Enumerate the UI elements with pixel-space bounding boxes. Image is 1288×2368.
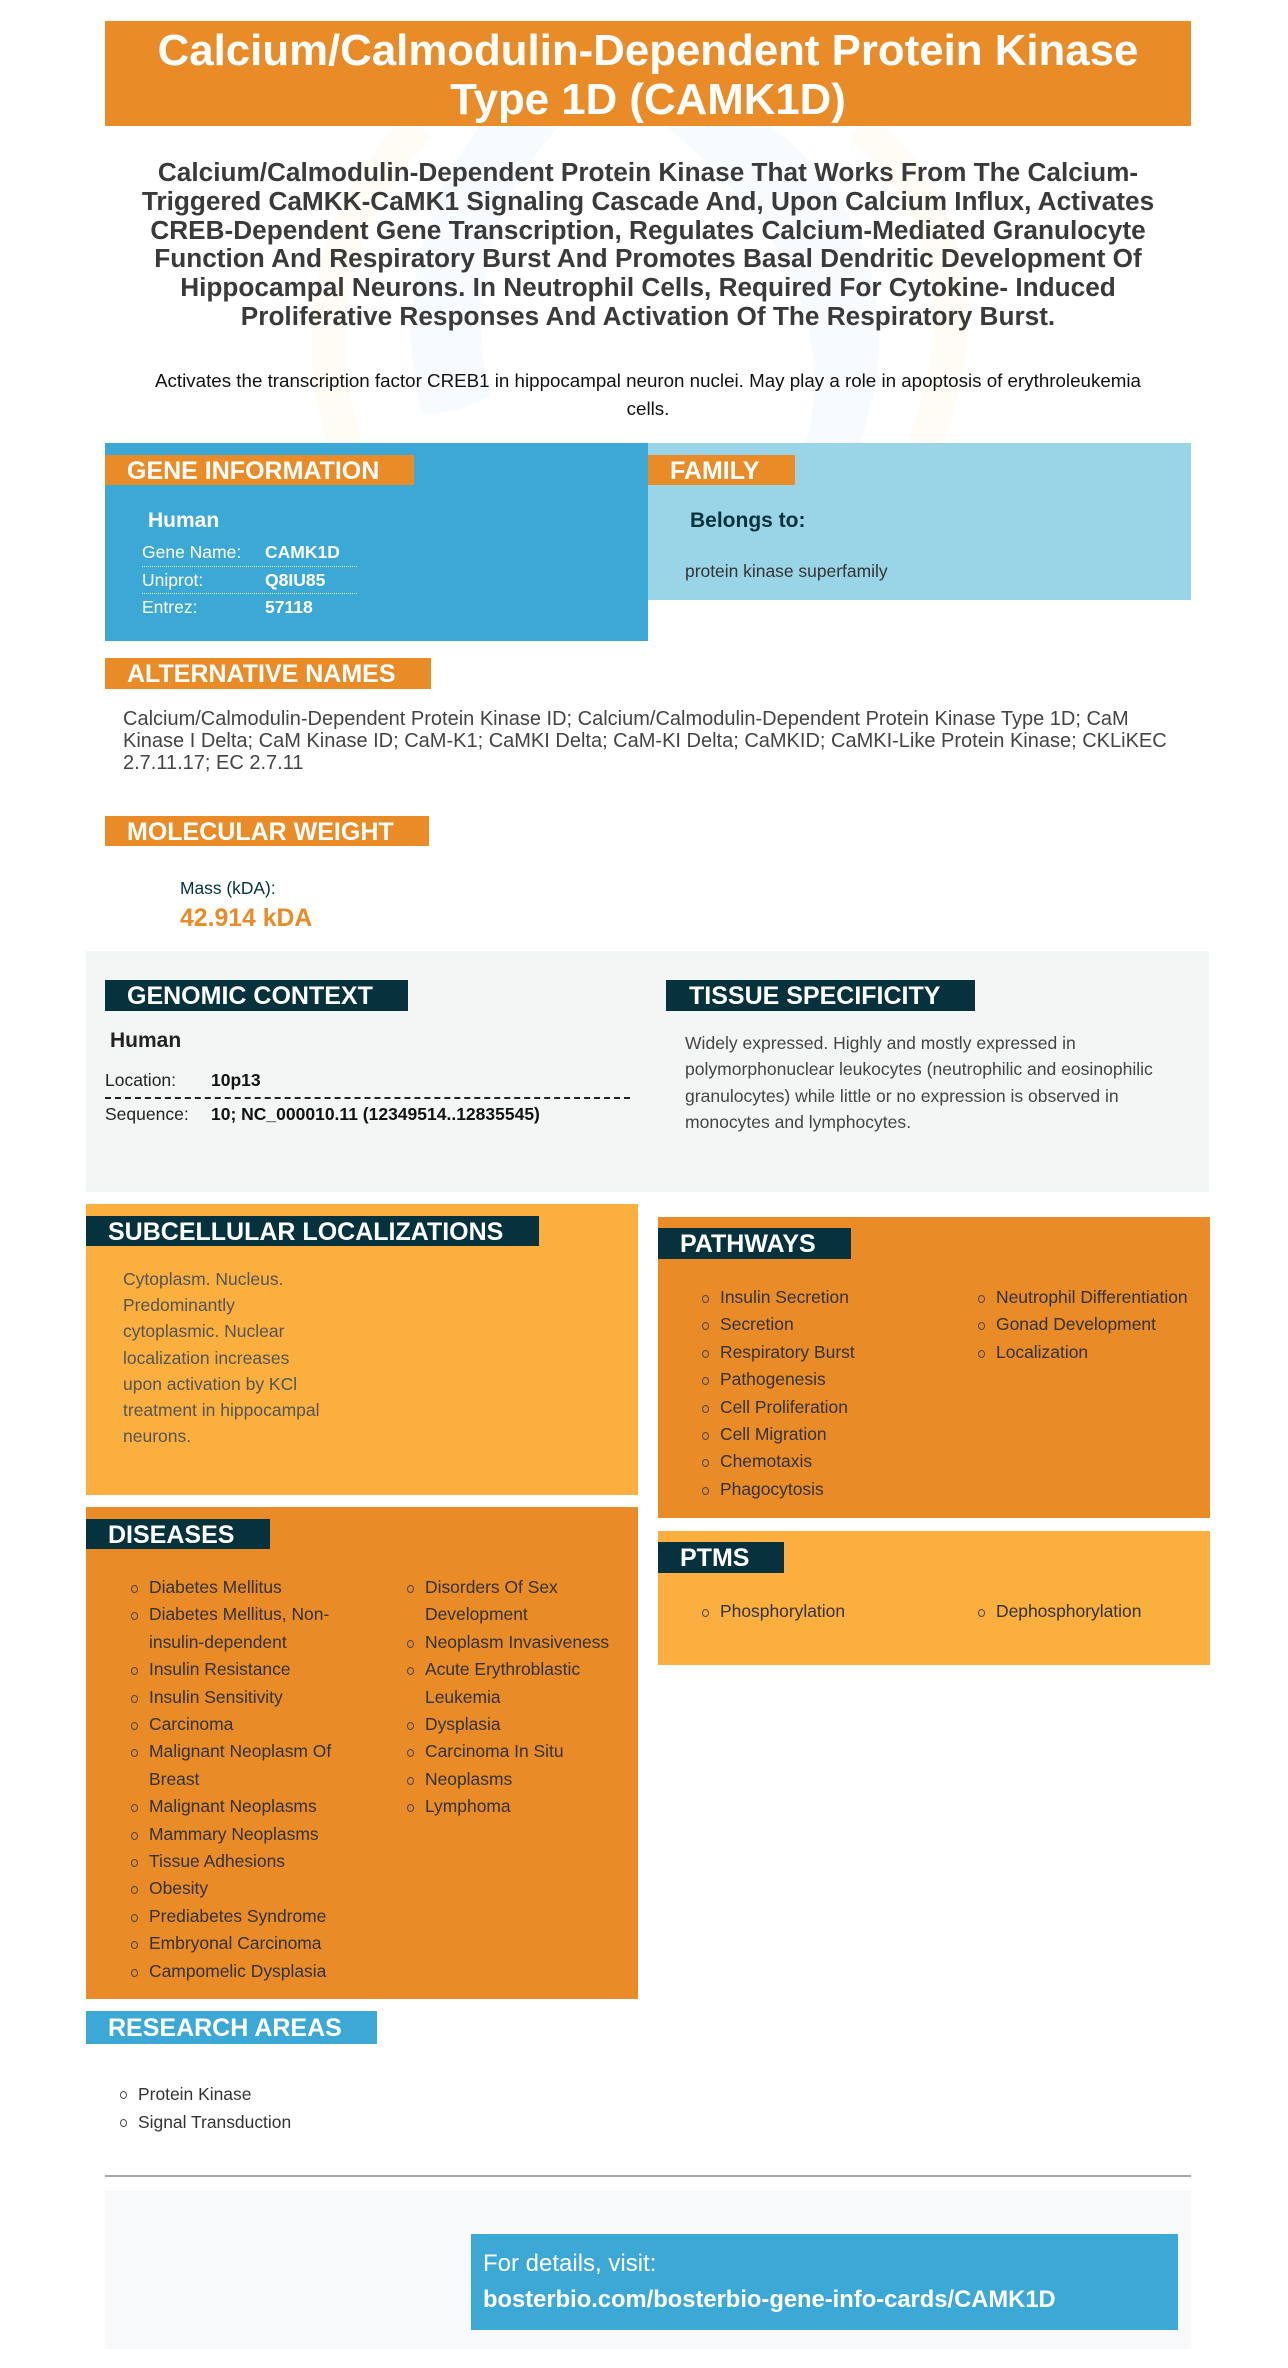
diseases list column 2: Development (425, 1604, 528, 1624)
heading: diseases: DISEASES (108, 1521, 234, 1549)
gene info table: Q8IU85 (265, 570, 325, 590)
panel: pathways (658, 1217, 1210, 1518)
diseases list column 1: Insulin Sensitivity (149, 1687, 283, 1707)
heading: subcellular localizations: SUBCELLULAR LOCALIZATIONS (108, 1218, 503, 1246)
pathways list column 1: Cell Proliferation (720, 1397, 848, 1417)
gene info table: CAMK1D (265, 542, 340, 562)
heading: tissue specificity: TISSUE SPECIFICITY (689, 982, 940, 1010)
panel: subcellular localizations (86, 1204, 638, 1495)
subtitle summary: Triggered CaMKK-CaMK1 Signaling Cascade And, Upon Calcium Influx, Activates (142, 186, 1154, 216)
pathways list column 2 (978, 1287, 1188, 1362)
divider line (105, 2175, 1191, 2177)
callout: details link (471, 2234, 1178, 2330)
diseases list column 1: Obesity (149, 1878, 208, 1898)
research areas list: Protein Kinase (138, 2084, 251, 2104)
gene info table: Entrez: (142, 597, 197, 617)
belongs to label: Belongs to: (690, 509, 806, 532)
genomic table: Sequence: (105, 1104, 189, 1124)
description paragraph: cells. (627, 398, 669, 419)
tissue specificity text: granulocytes) while little or no expression is observed in (685, 1086, 1119, 1106)
heading: family: FAMILY (670, 457, 759, 485)
genomic table: 10p13 (211, 1070, 261, 1090)
subtitle summary (142, 157, 1154, 331)
subtitle summary: CREB-Dependent Gene Transcription, Regulates Calcium-Mediated Granulocyte (150, 215, 1146, 245)
genomic table: 10; NC_000010.11 (12349514..12835545) (211, 1104, 540, 1124)
tissue specificity text: Widely expressed. Highly and mostly expressed in (685, 1033, 1076, 1053)
mass label: Mass (kDA): (180, 878, 276, 898)
heading: alternative names: ALTERNATIVE NAMES (127, 660, 396, 688)
localization text: cytoplasmic. Nuclear (123, 1321, 284, 1341)
pathways list column 1 (702, 1287, 855, 1499)
panel: gene information (105, 443, 648, 641)
description paragraph (155, 370, 1141, 419)
callout label: For details, visit: (483, 2250, 656, 2277)
tissue specificity text: polymorphonuclear leukocytes (neutrophilic and eosinophilic (685, 1059, 1153, 1079)
genomic table (105, 1070, 630, 1124)
research areas list: Signal Transduction (138, 2112, 291, 2132)
pathways list column 1: Insulin Secretion (720, 1287, 849, 1307)
gene info table: Gene Name: (142, 542, 241, 562)
pathways list column 1: Cell Migration (720, 1424, 827, 1444)
diseases list column 1 (131, 1577, 332, 1981)
heading: pathways (658, 1228, 851, 1259)
diseases list column 1: Tissue Adhesions (149, 1851, 285, 1871)
heading: family (648, 455, 795, 485)
heading: molecular weight: MOLECULAR WEIGHT (127, 818, 394, 846)
gene info table (142, 542, 357, 617)
subtitle summary: Proliferative Responses And Activation Of The Respiratory Burst. (241, 301, 1055, 331)
diseases list column 1: Mammary Neoplasms (149, 1824, 319, 1844)
pathways list column 1: Respiratory Burst (720, 1342, 855, 1362)
title banner (105, 21, 1191, 126)
tissue specificity text (685, 1033, 1153, 1132)
pathways list column 1: Secretion (720, 1314, 794, 1334)
gene info table: 57118 (265, 597, 313, 617)
molecular weight value (180, 878, 312, 932)
description paragraph: Activates the transcription factor CREB1 in hippocampal neuron nuclei. May play a role in apoptosis of erythroleukemia (155, 370, 1141, 391)
diseases list column 1: Malignant Neoplasms (149, 1796, 317, 1816)
pathways list column 2: Localization (996, 1342, 1088, 1362)
diseases list column 2: Carcinoma In Situ (425, 1741, 564, 1761)
localization text: localization increases (123, 1348, 289, 1368)
heading: research areas: RESEARCH AREAS (108, 2014, 342, 2042)
diseases list column 2: Lymphoma (425, 1796, 511, 1816)
gene info table: Uniprot: (142, 570, 203, 590)
pathways list column 2: Neutrophil Differentiation (996, 1287, 1188, 1307)
heading: gene information: GENE INFORMATION (127, 457, 379, 485)
diseases list column 1: insulin-dependent (149, 1632, 287, 1652)
diseases list column 1: Diabetes Mellitus (149, 1577, 282, 1597)
mass value: 42.914 kDA (180, 905, 312, 932)
diseases list column 1: Embryonal Carcinoma (149, 1933, 322, 1953)
localization text: treatment in hippocampal (123, 1400, 320, 1420)
species label: Human (148, 509, 219, 532)
localization text: neurons. (123, 1426, 191, 1446)
diseases list column 2: Acute Erythroblastic (425, 1659, 580, 1679)
title banner: Type 1D (CAMK1D) (450, 74, 846, 124)
subtitle summary: Function And Respiratory Burst And Promotes Basal Dendritic Development Of (154, 243, 1142, 273)
alternative names text: Kinase I Delta; CaM Kinase ID; CaM-K1; CaMKI Delta; CaM-KI Delta; CaMKID; CaMKI-Like Protein Kinase; CKLiKEC (123, 730, 1167, 752)
panel: PTMs (658, 1531, 1210, 1665)
diseases list column 1: Insulin Resistance (149, 1659, 291, 1679)
diseases list column 1: Prediabetes Syndrome (149, 1906, 326, 1926)
diseases list column 1: Carcinoma (149, 1714, 233, 1734)
subtitle summary: Hippocampal Neurons. In Neutrophil Cells, Required For Cytokine- Induced (180, 272, 1116, 302)
diseases list column 1: Campomelic Dysplasia (149, 1961, 326, 1981)
PTMs list column 2: Dephosphorylation (996, 1601, 1141, 1621)
pathways list column 2: Gonad Development (996, 1314, 1156, 1334)
diseases list column 2: Leukemia (425, 1687, 501, 1707)
heading: PTMs (658, 1542, 784, 1573)
diseases list column 1: Diabetes Mellitus, Non- (149, 1604, 329, 1624)
research areas list (120, 2084, 291, 2132)
heading: PTMs: PTMS (680, 1544, 749, 1572)
heading: genomic context: GENOMIC CONTEXT (127, 982, 373, 1010)
localization text: Cytoplasm. Nucleus. (123, 1269, 283, 1289)
pathways list column 1: Pathogenesis (720, 1369, 826, 1389)
tissue specificity text: monocytes and lymphocytes. (685, 1112, 911, 1132)
heading: research areas (86, 2011, 377, 2044)
PTMs list column 1: Phosphorylation (720, 1601, 845, 1621)
heading: diseases (86, 1519, 270, 1549)
alternative names text (123, 708, 1167, 774)
pathways list column 1: Phagocytosis (720, 1479, 824, 1499)
callout url: bosterbio.com/bosterbio-gene-info-cards/CAMK1D (483, 2286, 1056, 2313)
subtitle summary: Calcium/Calmodulin-Dependent Protein Kinase That Works From The Calcium- (158, 157, 1138, 187)
diseases list column 2: Neoplasm Invasiveness (425, 1632, 609, 1652)
diseases list column 2: Neoplasms (425, 1769, 512, 1789)
panel: diseases (86, 1507, 638, 1999)
localization text: upon activation by KCl (123, 1374, 297, 1394)
genomic table: Location: (105, 1070, 176, 1090)
diseases list column 1: Malignant Neoplasm Of (149, 1741, 331, 1761)
background watermark logo (312, 126, 967, 443)
family value: protein kinase superfamily (685, 561, 888, 581)
alternative names text: 2.7.11.17; EC 2.7.11 (123, 752, 304, 774)
title banner: Calcium/Calmodulin-Dependent Protein Kinase (158, 26, 1138, 75)
panel: family (648, 443, 1191, 600)
diseases list column 1: Breast (149, 1769, 199, 1789)
panel: footer (105, 2190, 1191, 2349)
heading: pathways: PATHWAYS (680, 1230, 816, 1258)
diseases list column 2: Disorders Of Sex (425, 1577, 558, 1597)
diseases list column 2 (407, 1577, 609, 1816)
alternative names text: Calcium/Calmodulin-Dependent Protein Kinase ID; Calcium/Calmodulin-Dependent Protein Kinase Type 1D; CaM (123, 708, 1129, 730)
localization text (123, 1269, 320, 1446)
panel: genomic context and tissue specificity (86, 951, 1209, 1192)
species label: Human (110, 1029, 181, 1052)
diseases list column 2: Dysplasia (425, 1714, 501, 1734)
localization text: Predominantly (123, 1295, 235, 1315)
pathways list column 1: Chemotaxis (720, 1451, 812, 1471)
